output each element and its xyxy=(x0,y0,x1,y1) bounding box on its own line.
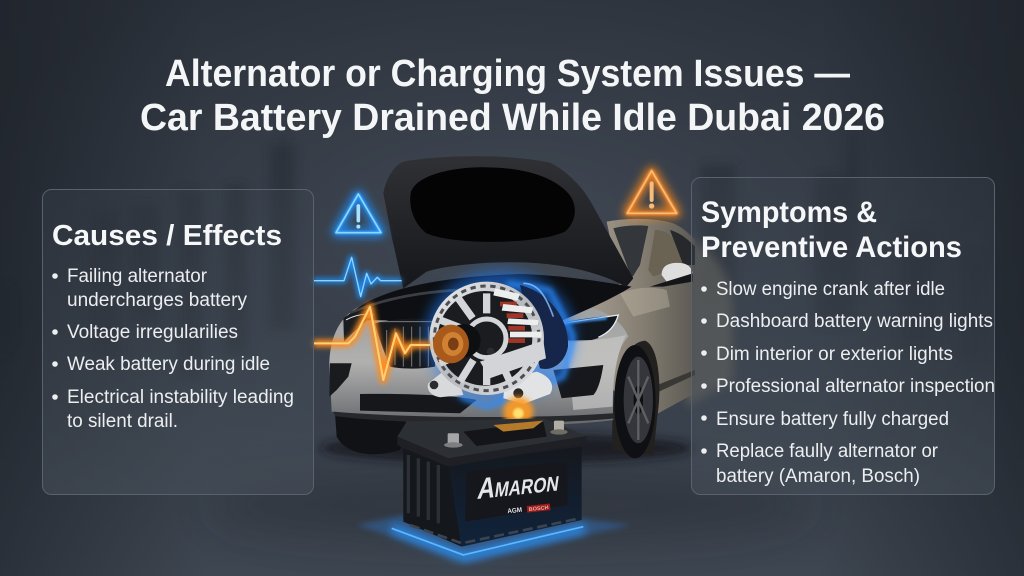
symptoms list: Ensure battery fully charged xyxy=(716,409,949,430)
battery xyxy=(397,418,587,547)
car roof and rear body xyxy=(587,219,695,417)
front left tyre xyxy=(335,413,407,454)
symptoms list: Replace faully alternator or xyxy=(716,441,939,462)
windscreen reflection xyxy=(430,264,620,282)
symptoms list: Dashboard battery warning lights xyxy=(716,311,993,332)
car shadow xyxy=(320,433,693,463)
AGM label: AGM xyxy=(507,507,523,515)
panel: symptoms and preventive actions xyxy=(692,178,995,494)
alternator blue glow xyxy=(425,270,575,407)
causes list: to silent drail. xyxy=(67,411,178,432)
heading: symptoms xyxy=(701,196,962,264)
symptoms list: Dim interior or exterior lights xyxy=(716,344,953,365)
symptoms list: battery (Amaron, Bosch) xyxy=(716,466,920,487)
hood lip reflection xyxy=(350,290,460,313)
heading: symptoms: Symptoms & xyxy=(701,196,877,229)
rear wheel well and wheel xyxy=(612,341,659,458)
blue pulse line xyxy=(313,257,402,297)
heading: symptoms: Preventive Actions xyxy=(701,231,962,264)
warning triangle orange xyxy=(627,171,677,213)
causes list: Failing alternator xyxy=(67,266,208,287)
symptoms list: Slow engine crank after idle xyxy=(716,279,945,300)
open hood xyxy=(383,156,633,288)
symptoms list xyxy=(701,279,995,487)
causes list: Weak battery during idle xyxy=(67,354,270,375)
alternator xyxy=(428,282,568,404)
blurred car rear seen through the panel xyxy=(687,237,733,407)
symptoms list: Professional alternator inspection xyxy=(716,376,995,397)
Bosch label: BOSCH xyxy=(528,505,549,513)
warning triangle blue xyxy=(336,194,381,233)
title xyxy=(140,53,885,139)
heading: causes: Causes / Effects xyxy=(52,220,282,252)
causes list xyxy=(52,266,294,432)
side mirror xyxy=(650,263,693,287)
title: Alternator or Charging System Issues — xyxy=(165,53,850,95)
sparks xyxy=(503,397,533,427)
battery glow platform xyxy=(357,503,632,562)
floor reflection xyxy=(210,470,810,540)
title: Car Battery Drained While Idle Dubai 2026 xyxy=(140,97,885,139)
background skyline xyxy=(0,100,990,380)
causes list: undercharges battery xyxy=(67,290,247,311)
Bosch label xyxy=(527,504,551,513)
brand text: AMARON xyxy=(476,464,562,506)
panel: causes and effects xyxy=(42,190,314,494)
grille and headlights xyxy=(329,311,618,423)
causes list: Electrical instability leading xyxy=(67,387,294,408)
bumper reflection xyxy=(567,335,626,410)
engine bay xyxy=(343,274,632,322)
car illustration xyxy=(313,156,733,562)
front body silver xyxy=(329,299,628,425)
orange pulse line xyxy=(313,307,430,380)
causes list: Voltage irregularilies xyxy=(67,322,238,343)
